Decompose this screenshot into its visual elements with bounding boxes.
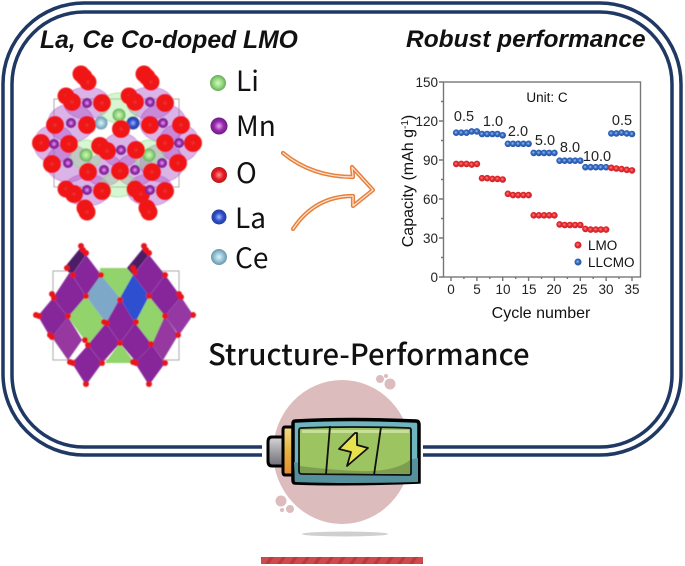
rate labels: 0.5: [612, 113, 632, 129]
x-axis tick labels: 30: [598, 282, 614, 297]
legend item: Mn: Mn: [236, 105, 276, 145]
y-axis title: ): [400, 115, 417, 120]
rate labels: 10.0: [583, 149, 611, 165]
x-axis tick labels: 35: [624, 282, 640, 297]
x-axis tick labels: [447, 282, 640, 297]
y-axis tick labels: 120: [415, 114, 438, 129]
legend item: La: [212, 197, 266, 237]
series: LMO: [453, 161, 635, 233]
x-axis tick labels: 10: [495, 282, 511, 297]
battery charge: [299, 427, 411, 475]
x-axis tick labels: 0: [447, 282, 455, 297]
y-axis tick labels: 150: [415, 75, 438, 90]
x-axis title: Cycle number: [492, 305, 591, 322]
rate labels: [454, 109, 632, 165]
legend item: Li: Li: [236, 60, 259, 100]
battery body: [293, 420, 419, 484]
unit note: Unit: C: [526, 90, 568, 105]
legend item: O: [211, 152, 257, 192]
series: LLCMO: [453, 128, 635, 170]
rate labels: 1.0: [483, 114, 503, 130]
crystal structure: ball model: [32, 66, 202, 220]
legend item: Mn: [210, 105, 276, 145]
chart axes: [439, 82, 640, 281]
y-axis tick labels: [415, 75, 438, 285]
chart: rate capability: [400, 75, 640, 322]
battery terminal: [268, 437, 283, 466]
ground shadow: [302, 532, 388, 536]
y-axis title: -1: [400, 120, 411, 129]
y-axis tick labels: 0: [430, 270, 438, 285]
heading: Structure-Performance: Structure-Performance: [208, 332, 529, 374]
rate labels: 8.0: [560, 140, 580, 156]
legend item: Ce: Ce: [235, 237, 268, 277]
icon: battery on pink circle: [268, 374, 419, 536]
y-axis tick labels: 90: [423, 153, 438, 168]
y-axis tick labels: 60: [423, 192, 438, 207]
x-axis tick labels: 5: [473, 282, 481, 297]
y-axis tick labels: 30: [423, 231, 438, 246]
legend item: La: La: [235, 197, 266, 237]
legend item: O: O: [236, 152, 257, 192]
panel: rounded double-line frame: [3, 3, 681, 455]
decorative bubbles: [276, 374, 396, 513]
rate labels: 0.5: [454, 109, 474, 125]
chart legend: LMO: [588, 238, 617, 253]
background circle: [273, 380, 411, 524]
chart legend: LLCMO: [588, 255, 635, 270]
rate labels: 2.0: [508, 124, 528, 140]
x-axis tick labels: 15: [521, 282, 537, 297]
x-axis tick labels: 20: [546, 282, 562, 297]
legend item: Li: [210, 60, 259, 100]
decorative red striped bar: [261, 557, 423, 564]
y-axis title: Capacity (mAh g: [400, 129, 417, 247]
crystal structure: polyhedral model: [33, 243, 196, 387]
legend item: Ce: [211, 237, 268, 277]
arrow: orange double-line curved arrow: [283, 153, 373, 229]
lightning bolt: [339, 433, 368, 466]
heading: La, Ce Co-doped LMO: La, Ce Co-doped LMO: [40, 27, 298, 54]
x-axis tick labels: 25: [572, 282, 588, 297]
chart legend: [574, 238, 635, 270]
rate labels: 5.0: [535, 133, 555, 149]
legend: element key: [210, 60, 276, 277]
heading: Robust performance: Robust performance: [406, 26, 646, 53]
battery collar: [283, 427, 293, 475]
